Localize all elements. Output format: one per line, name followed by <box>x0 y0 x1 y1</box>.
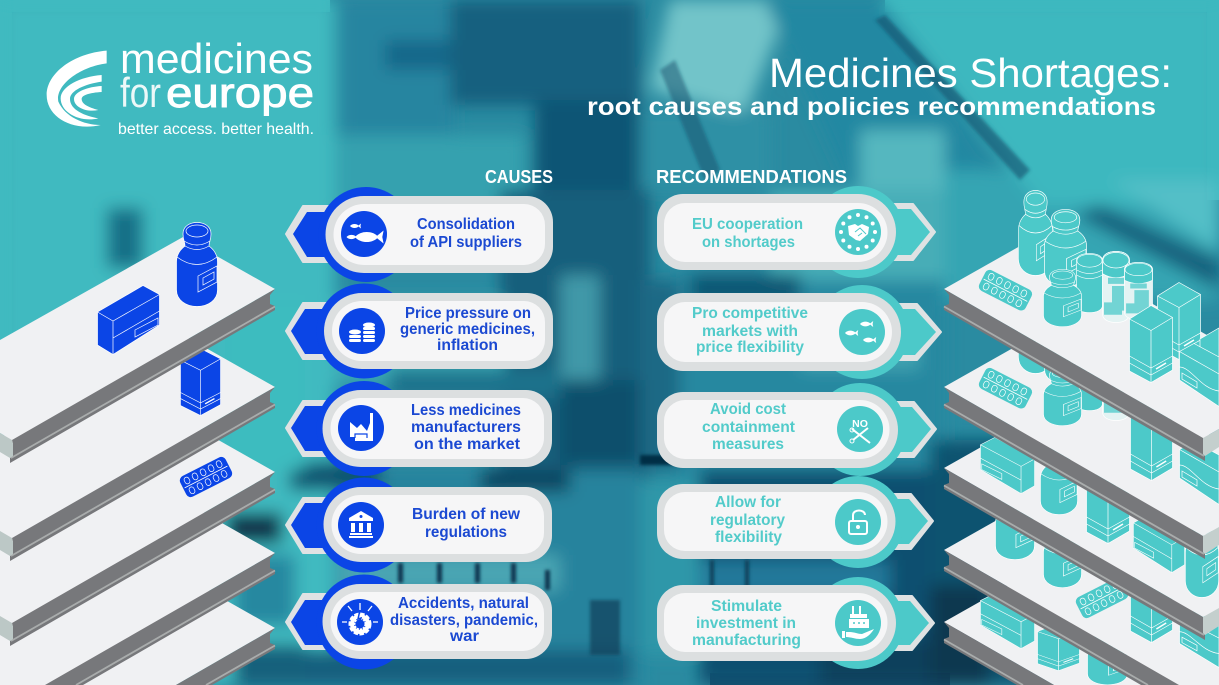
text: manufacturing <box>692 632 801 649</box>
icon: no scissors: NO <box>852 418 868 430</box>
icon: bank building <box>338 502 384 548</box>
panel: recommendation 5 stimulate investment <box>657 577 934 669</box>
left shelves with blue medicines <box>0 222 275 685</box>
icon: broken gear with rays <box>337 599 383 645</box>
icon: factory with declining chart <box>338 405 384 451</box>
panel: cause 3 fewer manufacturers <box>286 381 552 476</box>
text: Pro competitive <box>692 305 808 322</box>
text: Avoid cost <box>710 401 786 418</box>
logo tagline: better access. better health. <box>118 121 314 138</box>
icon: coins <box>339 308 385 354</box>
icon: blue blister pack <box>178 455 234 499</box>
icon: blue wide box <box>98 286 160 354</box>
text: markets with <box>702 323 798 340</box>
text: Accidents, natural <box>398 595 529 612</box>
text: war <box>449 628 479 645</box>
panel: cause 2 price pressure <box>286 284 553 378</box>
text: Price pressure on <box>405 305 531 322</box>
text: Allow for <box>715 494 781 511</box>
text: Stimulate <box>711 598 782 615</box>
text: manufacturers <box>411 419 521 436</box>
icon: three fish <box>839 309 885 355</box>
icon: teal bottles and jars <box>1018 191 1152 327</box>
text: generic medicines, <box>400 321 535 338</box>
text: disasters, pandemic, <box>390 612 538 629</box>
panel: recommendation 1 EU cooperation <box>657 186 935 278</box>
text: containment <box>702 419 795 436</box>
panel: cause 5 accidents <box>286 574 552 670</box>
text: on shortages <box>702 234 795 251</box>
icon: blue tall box <box>180 348 221 416</box>
text: Less medicines <box>411 402 521 419</box>
icon: no scissors <box>837 406 883 452</box>
text: Burden of new <box>412 506 521 523</box>
panel: recommendation 2 competitive markets <box>657 285 941 379</box>
logo: medicines for europe: for <box>120 69 161 116</box>
text: of API suppliers <box>410 234 522 251</box>
logo mark <box>47 51 107 127</box>
icon: fish consolidation <box>341 211 387 257</box>
text: measures <box>712 436 784 453</box>
panel: cause 1 consolidation of API suppliers <box>286 187 553 282</box>
text: flexibility <box>715 529 782 546</box>
right shelves with teal medicines <box>944 191 1219 685</box>
logo wordmark: medicines <box>120 35 313 82</box>
icon: teal blister pack <box>977 268 1034 312</box>
text: inflation <box>437 337 498 354</box>
icon: EU stars and handshake <box>835 209 881 255</box>
text: EU cooperation <box>692 216 803 233</box>
text: regulatory <box>710 512 785 529</box>
heading: causes: CAUSES <box>485 167 553 187</box>
icon: teal boxes <box>1130 282 1219 406</box>
text: Consolidation <box>417 216 515 233</box>
icon: open padlock <box>835 499 881 545</box>
title: Medicines Shortages: <box>769 50 1172 96</box>
text: investment in <box>696 615 796 632</box>
text: on the market <box>414 436 520 453</box>
heading: recommendations: RECOMMENDATIONS <box>656 167 847 187</box>
panel: recommendation 3 avoid cost containment <box>657 383 936 476</box>
text: regulations <box>425 524 507 541</box>
icon: blue bottle <box>176 222 218 306</box>
logo: medicines for europe <box>47 35 314 138</box>
subtitle: root causes and policies recommendations <box>587 93 1156 121</box>
panel: cause 4 burden of regulations <box>286 478 552 572</box>
panel: recommendation 4 regulatory flexibility <box>657 476 933 568</box>
logo: medicines for europe: europe <box>166 69 314 116</box>
icon: hand holding factory <box>835 600 881 646</box>
text: price flexibility <box>696 339 804 356</box>
